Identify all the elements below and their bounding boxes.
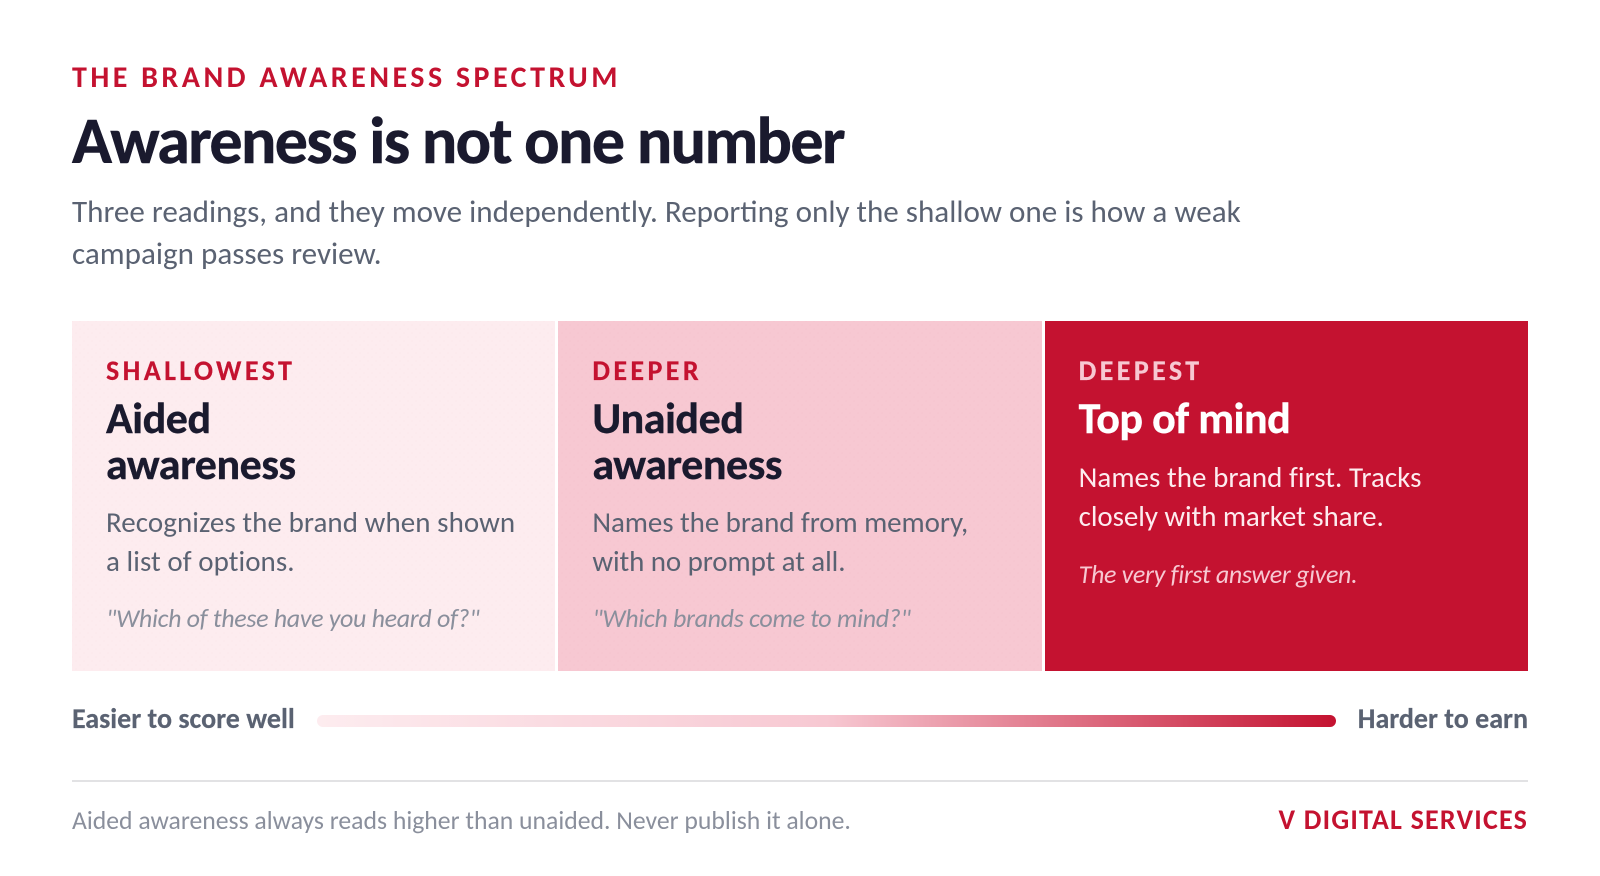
panel label: shallowest: SHALLOWEST	[106, 353, 295, 388]
panel description: unaided: Names the brand from memory,	[592, 504, 968, 540]
panel description: aided	[106, 504, 515, 579]
panel quote: aided: "Which of these have you heard of?"	[106, 602, 479, 634]
footnote: Aided awareness always reads higher than unaided. Never publish it alone.	[72, 805, 851, 836]
panel heading: aided awareness	[106, 391, 296, 490]
panel: aided awareness	[72, 321, 555, 671]
panel heading: top of mind: Top of mind	[1079, 391, 1290, 445]
panel heading: unaided awareness: awareness	[592, 436, 782, 490]
subtitle	[72, 193, 1241, 273]
panel description: unaided: with no prompt at all.	[592, 543, 845, 579]
brand mark: V DIGITAL SERVICES	[1279, 802, 1528, 837]
panel label: deepest: DEEPEST	[1079, 353, 1203, 388]
panel heading: unaided awareness	[592, 391, 782, 490]
title: Awareness is not one number	[72, 100, 844, 181]
panel description: top of mind: Names the brand first. Tracks	[1079, 459, 1422, 495]
eyebrow: THE BRAND AWARENESS SPECTRUM	[72, 59, 621, 96]
panel description: unaided	[592, 504, 968, 579]
subtitle: Three readings, and they move independently. Reporting only the shallow one is how a weak	[72, 193, 1241, 231]
panel description: aided: Recognizes the brand when shown	[106, 504, 515, 540]
panel quote: top of mind: The very first answer given.	[1079, 558, 1357, 590]
panel description: top of mind: closely with market share.	[1079, 498, 1384, 534]
subtitle: campaign passes review.	[72, 235, 382, 273]
panel description: aided: a list of options.	[106, 543, 295, 579]
panel heading: unaided awareness: Unaided	[592, 391, 744, 445]
panel quote: unaided: "Which brands come to mind?"	[592, 602, 911, 634]
scale label: harder: Harder to earn	[1358, 701, 1528, 736]
panel: unaided awareness	[558, 321, 1042, 671]
panel heading: aided awareness: Aided	[106, 391, 211, 445]
panel label: deeper: DEEPER	[592, 353, 702, 388]
panel heading: aided awareness: awareness	[106, 436, 296, 490]
panel description: top of mind	[1079, 459, 1422, 534]
scale label: easier: Easier to score well	[72, 701, 295, 736]
gradient scale bar	[317, 715, 1336, 727]
panel: top of mind	[1045, 321, 1528, 671]
